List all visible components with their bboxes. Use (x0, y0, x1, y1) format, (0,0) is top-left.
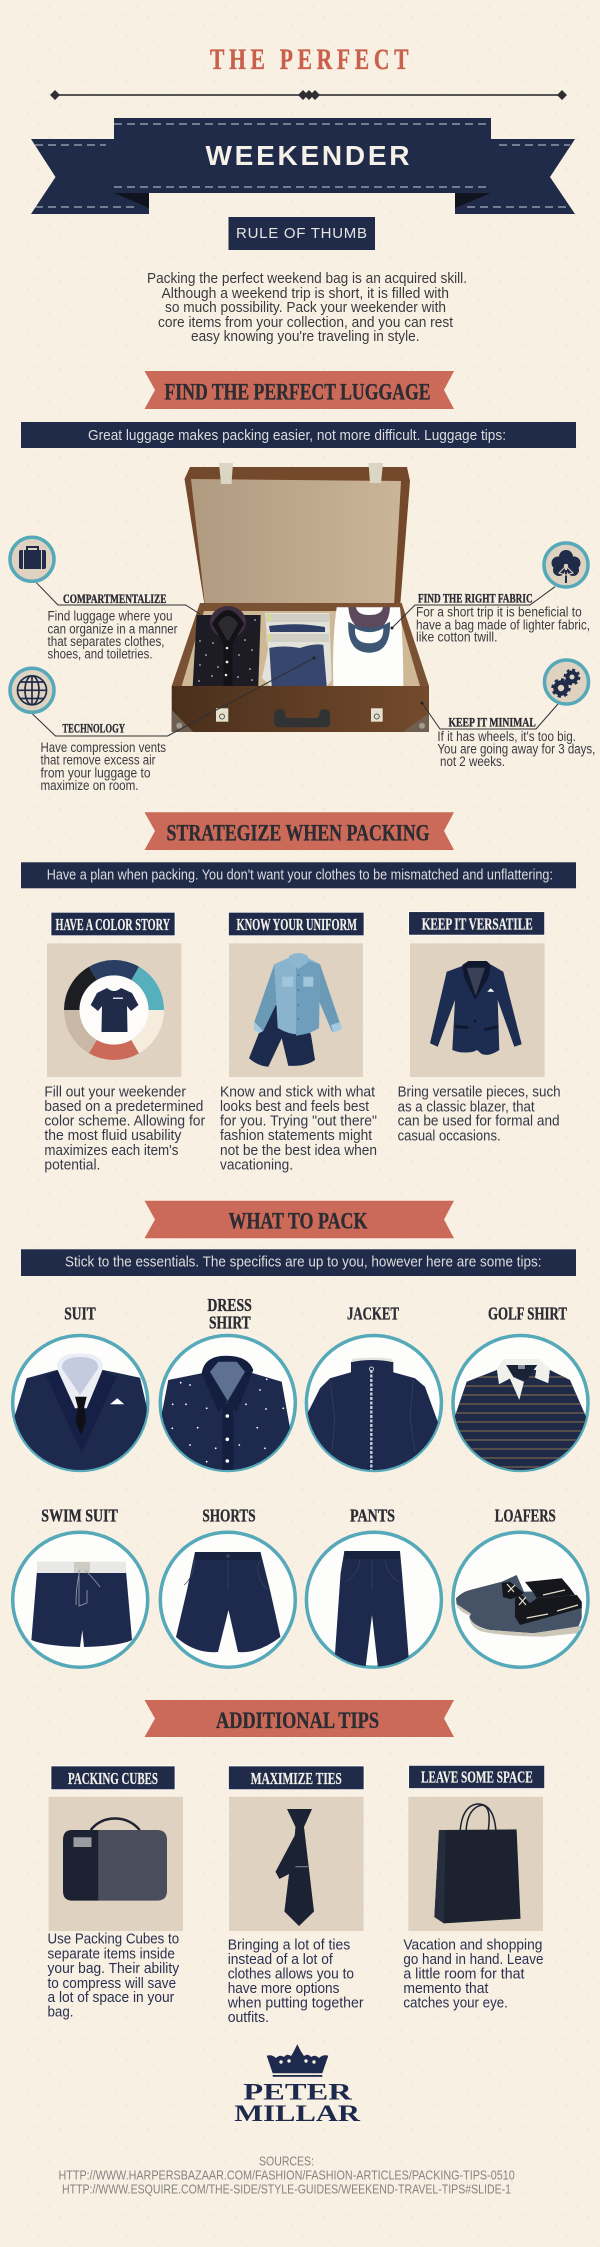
intro paragraph: so much possibility. Pack your weekender with (165, 299, 446, 316)
tag: have a color story (51, 912, 175, 936)
item: shorts (160, 1506, 295, 1667)
intro paragraph: easy knowing you're traveling in style. (191, 328, 420, 345)
intro bar: essentials (21, 1249, 576, 1276)
column text: space: catches your eye. (403, 1996, 508, 2012)
ribbon title text: WEEKENDER (206, 140, 410, 171)
sources: HTTP://WWW.HARPERSBAZAAR.COM/FASHION/FASHION-ARTICLES/PACKING-TIPS-0510 (58, 2168, 515, 2182)
ribbon: weekender (31, 118, 575, 214)
item: swim suit: SWIM SUIT (41, 1506, 118, 1526)
item: swim suit (13, 1506, 148, 1667)
intro bar: essentials: Stick to the essentials. The specifics are up to you, however here are some tips: (65, 1254, 542, 1270)
illustration: open suitcase with clothes (172, 463, 429, 732)
column text: packing cubes (48, 1931, 180, 2021)
column text: uniform: Know and stick with what (220, 1085, 375, 1101)
intro bar: luggage: Great luggage makes packing easier, not more difficult. Luggage tips: (88, 428, 506, 444)
column text: packing cubes: Use Packing Cubes to (48, 1931, 179, 1947)
item: suit (13, 1303, 148, 1475)
section banner: what to pack: WHAT TO PACK (228, 1208, 368, 1234)
tag: keep it versatile: KEEP IT VERSATILE (422, 914, 533, 933)
section banner: find the perfect luggage: FIND THE PERFECT LUGGAGE (164, 379, 430, 405)
logo: peter millar (234, 2044, 361, 2126)
callout: compartmentalize (48, 591, 178, 662)
item: golf shirt (453, 1303, 590, 1475)
column text: uniform: fashion statements might (220, 1128, 372, 1144)
callout leader lines (32, 583, 558, 736)
column text: uniform: not be the best idea when (220, 1143, 377, 1159)
item: jacket (305, 1303, 441, 1475)
icon: cotton (544, 543, 588, 587)
column text: uniform: looks best and feels best (220, 1099, 369, 1115)
section banner: what to pack (144, 1201, 454, 1238)
section banner: strategize when packing (144, 812, 454, 850)
sources: SOURCES: (259, 2154, 314, 2169)
icon: suitcase (10, 537, 54, 581)
dark shirt (193, 606, 261, 686)
ornamental divider (50, 90, 567, 100)
item: pants (306, 1506, 441, 1668)
column text: ties: outfits. (228, 2010, 269, 2026)
column text: color story: the most fluid usability (44, 1128, 182, 1144)
column text: space: go hand in hand. Leave (403, 1952, 543, 1968)
logo: peter millar: MILLAR (234, 2101, 361, 2126)
intro paragraph: Packing the perfect weekend bag is an acquired skill. (147, 270, 467, 287)
label: rule of thumb: RULE OF THUMB (236, 225, 367, 242)
column text: packing cubes: separate items inside (48, 1946, 175, 1962)
callout: compartmentalize: shoes, and toiletries. (48, 646, 152, 662)
callout: find the right fabric: FIND THE RIGHT FABRIC (418, 591, 533, 606)
intro paragraph: core items from your collection, and you can rest (158, 314, 454, 331)
item: dress shirt: DRESS (207, 1295, 252, 1315)
item: golf shirt: GOLF SHIRT (488, 1303, 567, 1323)
panel: navy blazer (410, 943, 545, 1077)
column text: ties: clothes allows you to (228, 1967, 354, 1983)
tag: maximize ties: MAXIMIZE TIES (251, 1769, 342, 1788)
panel: necktie (229, 1797, 364, 1931)
callout: find the right fabric: like cotton twill. (416, 630, 498, 645)
panel: color wheel with t-shirt (47, 943, 181, 1077)
column text: versatile: casual occasions. (398, 1129, 501, 1145)
column text: space (403, 1937, 543, 2012)
sources (58, 2154, 515, 2196)
column text: packing cubes: your bag. Their ability (48, 1961, 180, 1977)
column text: color story: based on a predetermined (44, 1099, 203, 1115)
section banner: additional tips (144, 1700, 454, 1737)
column text: color story: Fill out your weekender (44, 1085, 186, 1101)
label: rule of thumb (228, 217, 375, 250)
tag: packing cubes (51, 1766, 175, 1790)
tag: leave some space (409, 1765, 545, 1788)
callout: compartmentalize: can organize in a manner (48, 621, 178, 636)
section banner: additional tips: ADDITIONAL TIPS (216, 1708, 379, 1734)
callout: compartmentalize: COMPARTMENTALIZE (63, 591, 166, 606)
logo: peter millar: PETER (243, 2079, 352, 2104)
title: the perfect: THE PERFECT (210, 43, 413, 76)
intro bar: luggage (21, 422, 576, 448)
column text: space: a little room for that (403, 1967, 524, 1983)
callout: find the right fabric: For a short trip it is beneficial to (416, 605, 582, 620)
column text: space: memento that (403, 1981, 488, 1997)
item: shorts: SHORTS (202, 1506, 256, 1526)
column text: versatile (398, 1085, 561, 1145)
item: loafers (453, 1506, 588, 1667)
callout: keep it minimal: If it has wheels, it's too big. (437, 729, 576, 744)
column text: color story: potential. (44, 1157, 100, 1173)
panel: packing cube (49, 1797, 183, 1931)
column text: ties: when putting together (227, 1996, 364, 2012)
column text: versatile: Bring versatile pieces, such (398, 1085, 561, 1101)
item: dress shirt: SHIRT (209, 1312, 251, 1332)
icon: globe (10, 668, 54, 712)
panel: denim shirt and shorts (229, 943, 363, 1077)
column text: ties: have more options (228, 1981, 339, 1997)
callout: technology (40, 721, 166, 793)
column text: color story (44, 1085, 205, 1173)
item: jacket: JACKET (347, 1303, 399, 1323)
callout: compartmentalize: that separates clothes, (48, 634, 164, 649)
section banner: strategize when packing: STRATEGIZE WHEN PACKING (166, 821, 430, 847)
sources: HTTP://WWW.ESQUIRE.COM/THE-SIDE/STYLE-GUIDES/WEEKEND-TRAVEL-TIPS#SLIDE-1 (62, 2182, 511, 2196)
column text: ties: instead of a lot of (228, 1952, 334, 1968)
callout: keep it minimal (437, 715, 595, 769)
callout: keep it minimal: KEEP IT MINIMAL (448, 715, 536, 730)
column text: uniform: for you. Trying "out there" (220, 1114, 377, 1130)
tag: know your uniform (228, 912, 364, 936)
column text: ties (227, 1937, 364, 2026)
tag: leave some space: LEAVE SOME SPACE (421, 1767, 533, 1786)
tag: know your uniform: KNOW YOUR UNIFORM (236, 915, 357, 934)
column text: uniform: vacationing. (220, 1157, 293, 1173)
intro paragraph: Although a weekend trip is short, it is filled with (162, 285, 449, 302)
item: dress shirt (160, 1295, 295, 1475)
column text: color story: maximizes each item's (44, 1143, 178, 1159)
callout: compartmentalize: Find luggage where you (48, 609, 172, 624)
icon: gears (544, 660, 588, 704)
callout: technology: from your luggage to (40, 765, 150, 780)
callout: technology: that remove excess air (40, 753, 156, 768)
packing cubes (262, 613, 332, 686)
column text: packing cubes: to compress will save (48, 1976, 176, 1992)
column text: space: Vacation and shopping (403, 1937, 542, 1953)
column text: uniform (220, 1085, 377, 1173)
item: pants: PANTS (350, 1506, 395, 1526)
intro bar: strategy (21, 862, 576, 888)
callout: technology: maximize on room. (40, 778, 138, 793)
column text: packing cubes: a lot of space in your (48, 1990, 174, 2006)
callout: technology: Have compression vents (40, 740, 166, 755)
column text: color story: color scheme. Allowing for (44, 1114, 205, 1130)
panel: shopping bag (408, 1797, 543, 1931)
callout: find the right fabric (416, 591, 590, 645)
section banner: find the perfect luggage (144, 371, 454, 409)
white tee (333, 607, 403, 686)
column text: packing cubes: bag. (48, 2005, 74, 2021)
intro paragraph (147, 270, 467, 345)
column text: versatile: can be used for formal and (398, 1114, 560, 1130)
callout: keep it minimal: not 2 weeks. (440, 754, 505, 769)
column text: versatile: as a classic blazer, that (398, 1100, 535, 1116)
tag: have a color story: HAVE A COLOR STORY (56, 915, 170, 934)
item: suit: SUIT (64, 1303, 96, 1323)
tag: packing cubes: PACKING CUBES (68, 1769, 158, 1788)
column text: ties: Bringing a lot of ties (228, 1937, 350, 1953)
item: loafers: LOAFERS (495, 1506, 556, 1526)
tag: maximize ties (228, 1766, 364, 1790)
callout: technology: TECHNOLOGY (62, 721, 125, 736)
tag: keep it versatile (409, 912, 545, 935)
